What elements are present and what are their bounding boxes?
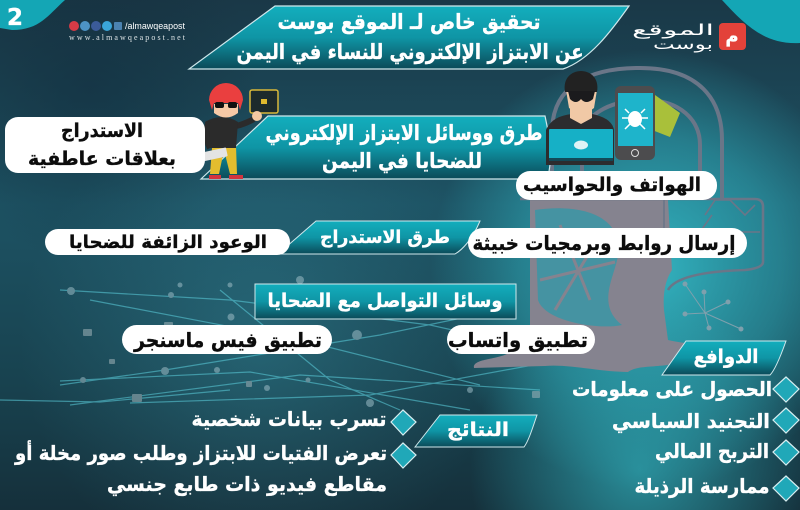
banner: communication channels bbox=[255, 284, 516, 319]
title banner bbox=[189, 6, 629, 69]
icon: hacker character with tablet bbox=[200, 83, 278, 179]
callout: false promises bbox=[45, 229, 290, 255]
callout: emotional luring: بعلاقات عاطفية bbox=[28, 148, 176, 170]
subtitle banner: طرق ووسائل الابتزاز الإلكتروني bbox=[266, 121, 542, 145]
banner: motives: الدوافع bbox=[694, 346, 758, 368]
callout: phones and computers bbox=[516, 171, 717, 200]
network lines bbox=[0, 276, 560, 410]
social handles: www.almawqeapost.net bbox=[69, 33, 186, 42]
corner tab with page number bbox=[0, 0, 65, 31]
callout: phones and computers: الهواتف والحواسيب bbox=[523, 174, 701, 196]
corner tab with page number: 2 bbox=[7, 5, 23, 31]
banner: results bbox=[415, 415, 537, 447]
list: motives: الحصول على معلومات bbox=[572, 377, 772, 401]
logo bbox=[632, 21, 746, 53]
callout: whatsapp: تطبيق واتساب bbox=[448, 328, 588, 352]
list: motives: التجنيد السياسي bbox=[612, 409, 770, 434]
banner: motives bbox=[662, 341, 786, 375]
logo: م bbox=[725, 26, 739, 47]
banner: luring methods: طرق الاستدراج bbox=[320, 227, 450, 248]
callout: emotional luring bbox=[5, 117, 205, 173]
logo: بوست bbox=[653, 37, 713, 53]
banner: luring methods bbox=[278, 221, 480, 254]
list: results: تسرب بيانات شخصية bbox=[192, 407, 386, 431]
social handles bbox=[69, 21, 186, 42]
callout: emotional luring: الاستدراج bbox=[61, 120, 143, 142]
logo: الموقع bbox=[632, 21, 714, 39]
callout: false promises: الوعود الزائفة للضحايا bbox=[69, 232, 267, 253]
subtitle banner: للضحايا في اليمن bbox=[322, 149, 482, 173]
list: motives: التربح المالي bbox=[655, 439, 769, 464]
callout: facebook messenger: تطبيق فيس ماسنجر bbox=[133, 328, 322, 352]
icon: masked hacker with laptop bbox=[546, 71, 614, 165]
callout: malicious links: إرسال روابط وبرمجيات خبيثة bbox=[472, 231, 736, 255]
list: results bbox=[14, 407, 416, 497]
icon: phone with bug and cash bbox=[615, 86, 680, 160]
top right corner tab bbox=[722, 0, 800, 43]
title banner: تحقيق خاص لـ الموقع بوست bbox=[278, 10, 540, 34]
list: results: مقاطع فيديو ذات طابع جنسي bbox=[107, 472, 387, 497]
background padlock with fingerprint bbox=[474, 68, 763, 372]
banner: communication channels: وسائل التواصل مع الضحايا bbox=[268, 290, 502, 312]
list: results: تعرض الفتيات للابتزاز وطلب صور مخلة أو bbox=[14, 439, 387, 465]
banner: results: النتائج bbox=[447, 419, 509, 441]
list: motives: ممارسة الرذيلة bbox=[634, 474, 770, 498]
social handles: /almawqeapost bbox=[125, 21, 185, 31]
title banner: عن الابتزاز الإلكتروني للنساء في اليمن bbox=[236, 40, 584, 64]
subtitle banner bbox=[201, 116, 552, 179]
list: motives bbox=[572, 377, 799, 501]
